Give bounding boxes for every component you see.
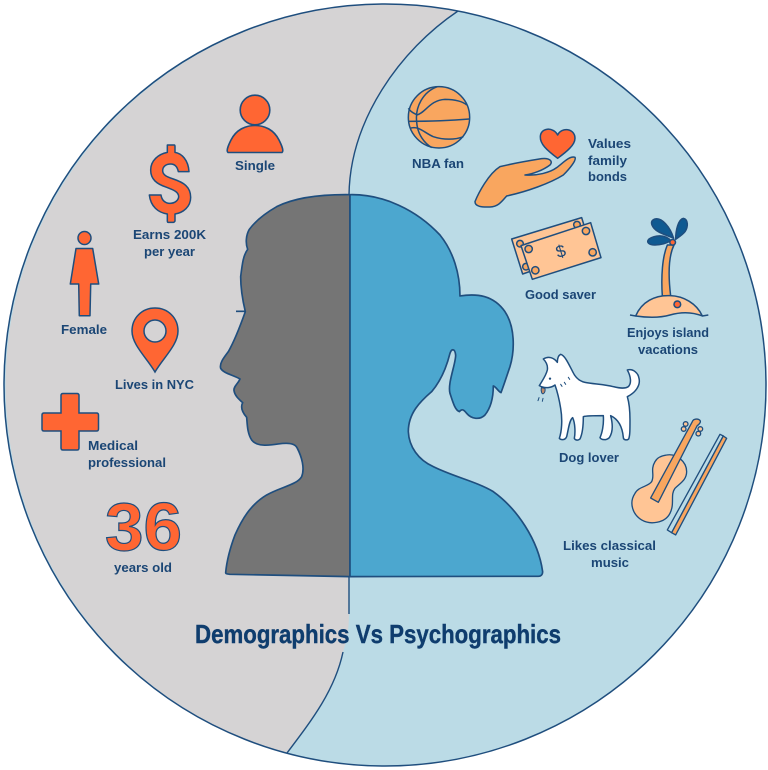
silhouette: psychographics half bbox=[350, 195, 543, 577]
label: Good saver bbox=[525, 287, 596, 302]
item: dog lover bbox=[538, 354, 639, 465]
item: location bbox=[115, 308, 195, 392]
label: Likes classical bbox=[563, 538, 656, 553]
item: good saver bbox=[512, 218, 601, 302]
item: family bonds bbox=[475, 129, 631, 207]
label: Enjoys island bbox=[627, 325, 709, 340]
number: 36: 36 bbox=[105, 489, 182, 565]
dollar mark: $ bbox=[554, 241, 569, 262]
item: classical music bbox=[563, 419, 727, 570]
label: Dog lover bbox=[559, 450, 619, 465]
item: NBA fan bbox=[408, 87, 470, 171]
icon: person bbox=[227, 95, 283, 152]
label: Values bbox=[588, 136, 631, 151]
item: medical professional bbox=[42, 394, 166, 470]
icon: medical cross bbox=[42, 394, 98, 450]
panel: demographics background half bbox=[6, 4, 458, 753]
label: Medical bbox=[88, 438, 138, 453]
label line two: professional bbox=[88, 455, 166, 470]
label line two: music bbox=[591, 555, 629, 570]
silhouette: small tick mark bbox=[236, 309, 245, 314]
item: female bbox=[61, 232, 107, 337]
label line two: per year bbox=[144, 244, 195, 259]
label line two: family bbox=[588, 153, 628, 168]
icon: female figure bbox=[70, 232, 99, 316]
label: years old bbox=[114, 560, 172, 575]
label line two: vacations bbox=[638, 342, 698, 357]
item: single bbox=[227, 95, 283, 173]
icon: dollar sign bbox=[149, 145, 191, 222]
head silhouette bbox=[220, 195, 543, 577]
icon: dog bbox=[538, 354, 639, 440]
label: Single bbox=[235, 158, 275, 173]
icon: heart in hand bbox=[475, 129, 575, 207]
heart bbox=[540, 129, 575, 158]
title: Demographics Vs Psychographics bbox=[195, 619, 561, 649]
icon: banknotes bbox=[512, 218, 601, 279]
item: island vacations bbox=[627, 218, 709, 357]
icon: basketball bbox=[408, 87, 470, 148]
silhouette: demographics half bbox=[220, 195, 350, 577]
icon: palm island bbox=[630, 218, 708, 317]
label line three: bonds bbox=[588, 169, 627, 184]
label: Female bbox=[61, 322, 107, 337]
item: income bbox=[133, 145, 207, 259]
item: age bbox=[105, 489, 182, 575]
label: Lives in NYC bbox=[115, 377, 195, 392]
label: NBA fan bbox=[412, 156, 464, 171]
label: Earns 200K bbox=[133, 227, 207, 242]
hand bbox=[475, 157, 575, 207]
icon: map pin bbox=[132, 308, 178, 372]
icon: violin and bow bbox=[632, 419, 727, 535]
divider curve bbox=[287, 11, 458, 753]
